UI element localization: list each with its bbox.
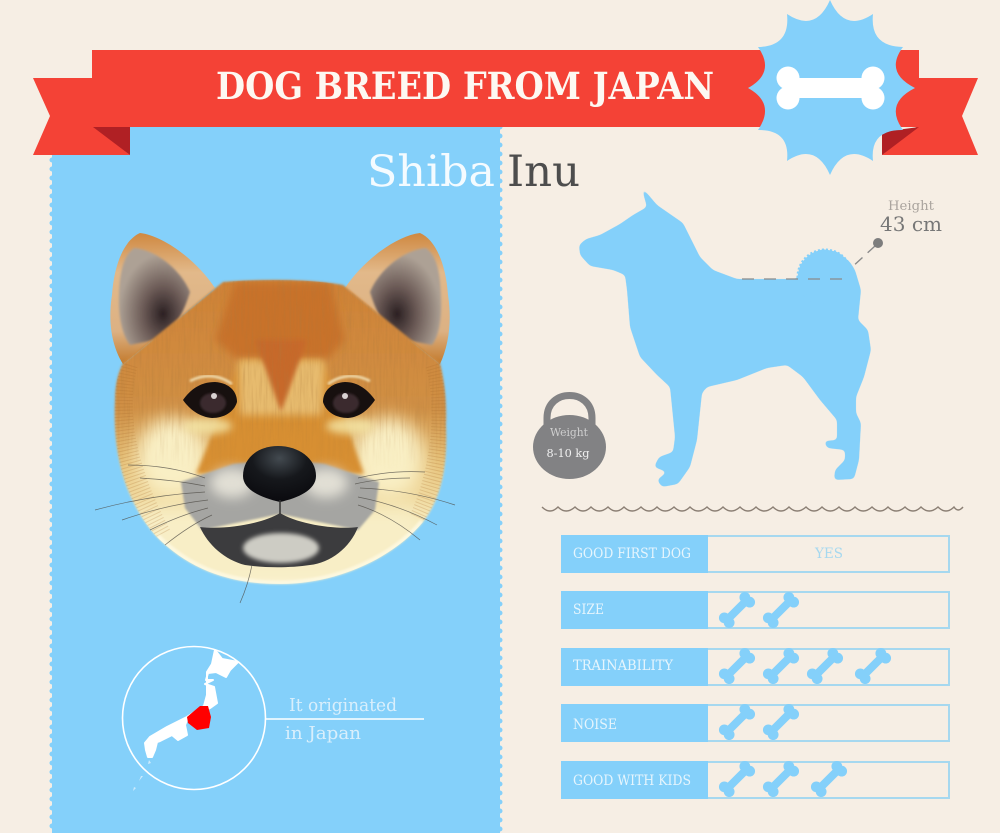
row: size [561,590,949,630]
highlighted region [187,706,211,730]
wave divider [542,507,963,511]
left eye [183,376,237,434]
origin text line 1: It originated [289,695,397,716]
left ear [110,233,215,364]
dog tail fuzz [798,250,852,304]
japan locator map [122,646,424,791]
weight label: Weight [550,425,588,439]
height label: Height [888,199,935,214]
height value: 43 cm [880,212,942,236]
row: good first dog [561,535,949,573]
dog silhouette [579,186,871,487]
height marker [742,238,883,279]
mouth [200,513,358,567]
row: good first dog: GOOD FIRST DOG [573,546,691,562]
right ear [345,233,450,364]
badge: starburst with bone [748,0,915,175]
row: trainability: TRAINABILITY [573,658,674,674]
origin text line 2: in Japan [285,723,361,744]
head [115,280,446,584]
row: size: SIZE [573,602,604,618]
row: noise [561,702,949,742]
breed name: Inu: Inu [507,147,580,197]
nose [243,446,316,514]
connector line [266,718,424,720]
right eye [323,376,375,434]
whiskers [95,465,455,603]
muzzle [181,461,379,530]
row: good with kids: GOOD WITH KIDS [573,773,691,789]
dog portrait [95,233,455,603]
row: good with kids [561,759,949,799]
breed name: Shiba: Shiba [367,147,495,197]
lower lip [243,533,319,563]
kettlebell weight [533,396,606,479]
japan islands [145,650,238,757]
face markings [115,280,447,584]
row: good first dog: YES [814,546,843,562]
panel: blue left column [52,127,500,833]
row: trainability [561,646,949,686]
circle [122,646,266,790]
banner ribbon [33,50,978,155]
ryukyu islands [133,760,151,791]
title: DOG BREED FROM JAPAN [216,64,714,108]
weight value: 8-10 kg [546,446,590,460]
row: noise: NOISE [573,717,617,733]
